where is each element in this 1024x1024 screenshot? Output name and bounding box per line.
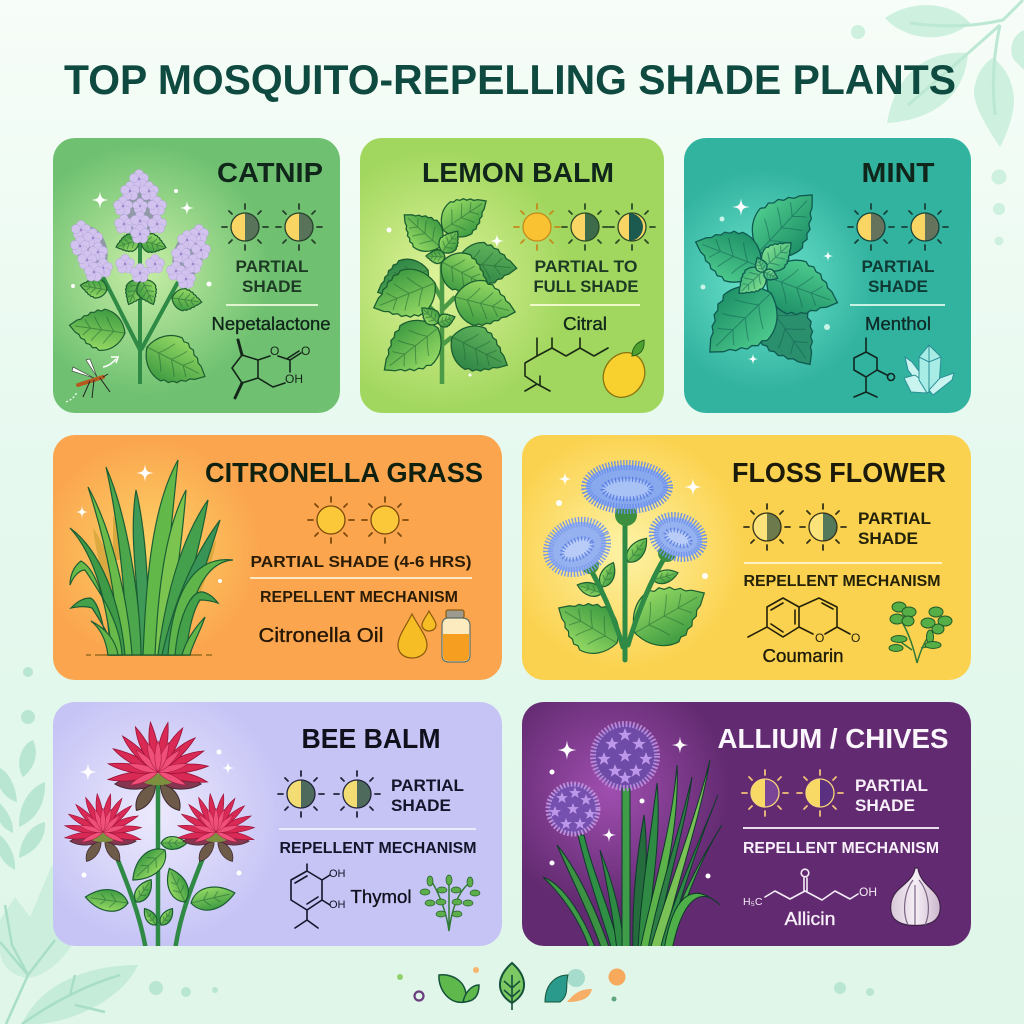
compound name: Nepetalactone	[212, 313, 330, 334]
icon: garlic bulb	[891, 868, 940, 926]
citronella grass illustration	[70, 460, 233, 656]
light label: PARTIAL SHADE (4-6 HRS)	[250, 554, 472, 571]
citronella name: CITRONELLA GRASS	[205, 457, 483, 488]
decorative leaves bottom left	[0, 667, 874, 1024]
light label line 2: FULL SHADE	[534, 277, 638, 296]
compound name: Citral	[563, 313, 607, 334]
sun icons: partial shade	[222, 204, 322, 250]
sun icons: partial shade	[744, 504, 846, 550]
title: TOP MOSQUITO-REPELLING SHADE PLANTS	[64, 56, 956, 103]
light label line 2: SHADE	[391, 796, 451, 815]
lemon balm name: LEMON BALM	[422, 157, 614, 188]
icon: lemon	[595, 340, 653, 405]
mint plant illustration	[686, 175, 847, 380]
molecule: menthol	[854, 338, 894, 397]
panel: catnip	[53, 138, 340, 413]
mint name: MINT	[862, 157, 934, 188]
light label: PARTIAL	[391, 776, 464, 795]
mechanism label: REPELLENT MECHANISM	[260, 589, 458, 606]
panel: lemon balm	[360, 138, 664, 413]
light label line 2: SHADE	[858, 529, 918, 548]
compound name: Thymol	[350, 886, 412, 907]
sun icons: partial shade	[848, 204, 948, 250]
icon: oil drops and bottle	[398, 610, 470, 662]
floss flower name: FLOSS FLOWER	[732, 457, 946, 488]
footer decoration: leaves and dots	[397, 963, 626, 1010]
light label: PARTIAL	[858, 509, 931, 528]
mechanism label: REPELLENT MECHANISM	[743, 840, 939, 857]
panel: mint	[684, 138, 971, 413]
compound name: Allicin	[784, 908, 836, 929]
icon: thyme sprig	[420, 875, 480, 931]
catnip name: CATNIP	[217, 157, 323, 188]
catnip plant illustration	[67, 169, 216, 398]
molecule: allicin: H₅C	[743, 896, 763, 908]
panel: bee balm	[53, 702, 502, 950]
compound name: Citronella Oil	[258, 625, 384, 647]
panel: allium / chives	[522, 702, 971, 950]
light label line 2: SHADE	[855, 796, 915, 815]
bee balm name: BEE BALM	[302, 723, 440, 754]
molecule: thymol	[291, 864, 346, 928]
molecule: nepetalactone: O	[301, 344, 310, 358]
sun icons: partial shade	[278, 771, 380, 817]
decorative leaves top right	[851, 0, 1024, 246]
icon: clover sprig	[889, 602, 952, 663]
allium illustration	[543, 724, 722, 950]
lemon balm plant illustration	[365, 185, 521, 390]
light label: PARTIAL TO	[534, 257, 638, 276]
molecule: nepetalactone: OH	[285, 372, 303, 386]
light label: PARTIAL	[855, 776, 928, 795]
mechanism label: REPELLENT MECHANISM	[280, 840, 476, 857]
mechanism label: REPELLENT MECHANISM	[744, 573, 940, 590]
molecule: coumarin: O	[815, 631, 824, 645]
compound name: Menthol	[865, 313, 931, 334]
light label: PARTIAL	[236, 257, 308, 276]
panel: floss flower	[522, 435, 971, 680]
sun icons: partial shade	[742, 770, 843, 816]
allium name: ALLIUM / CHIVES	[718, 723, 948, 754]
compound name: Coumarin	[762, 645, 844, 666]
light label line 2: SHADE	[242, 277, 302, 296]
light label line 2: SHADE	[868, 277, 928, 296]
molecule: nepetalactone: O	[270, 344, 279, 358]
molecule: thymol: OH	[329, 899, 346, 911]
panel: citronella grass	[53, 435, 502, 680]
mosquito icon	[66, 357, 118, 402]
molecule: citral	[525, 338, 608, 391]
molecule: allicin	[743, 869, 877, 908]
floss flower illustration	[540, 465, 719, 665]
molecule: thymol: OH	[329, 868, 346, 880]
molecule: coumarin: O	[851, 631, 860, 645]
bee balm illustration	[64, 722, 255, 950]
molecule: allicin: OH	[859, 885, 877, 899]
molecule: nepetalactone	[232, 340, 310, 398]
icon: crystals	[904, 345, 954, 395]
sun icons: partial to full shade	[514, 204, 655, 250]
sun icons	[308, 497, 408, 543]
molecule: coumarin	[748, 598, 860, 645]
light label: PARTIAL	[862, 257, 934, 276]
